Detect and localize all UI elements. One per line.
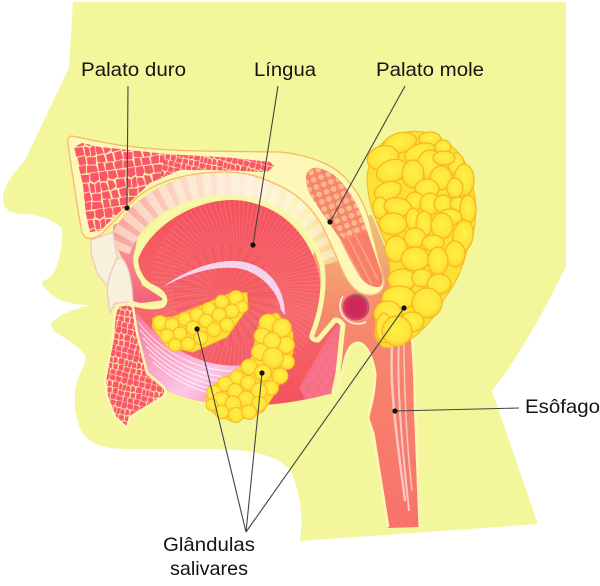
uvula	[338, 289, 374, 325]
palate cream band	[68, 136, 384, 295]
upper salivary gland	[364, 129, 476, 347]
pink gland texture	[299, 324, 340, 399]
label: palato mole: Palato mole	[376, 59, 484, 81]
lower jaw bone	[105, 304, 165, 428]
label: glândulas salivares: Glândulas	[163, 534, 255, 556]
esophagus muscle streaks	[392, 340, 412, 510]
tongue radial muscle fibres	[182, 227, 298, 343]
tongue fold	[163, 261, 285, 315]
submandibular gland	[206, 313, 294, 422]
leader line: palato mole	[327, 86, 405, 225]
sublingual gland	[152, 290, 248, 352]
label: esôfago: Esôfago	[525, 396, 600, 418]
label: glândulas salivares: salivares	[170, 558, 248, 580]
lower tongue fibres	[195, 265, 255, 325]
pink bowl	[136, 312, 240, 402]
bowl stripes	[138, 322, 234, 392]
gum and ridged arch	[113, 184, 335, 304]
soft palate muscle	[306, 168, 383, 288]
throat cream edges	[336, 335, 420, 527]
leader line: esôfago	[392, 408, 519, 414]
hard palate bone	[74, 143, 274, 232]
leader line: língua	[250, 86, 278, 248]
label: palato duro: Palato duro	[81, 59, 186, 81]
tongue cream outline	[131, 197, 343, 392]
tongue	[131, 197, 345, 408]
leader line: palato duro	[124, 86, 130, 211]
label: glândulas salivares	[163, 534, 255, 580]
teeth	[91, 232, 133, 313]
throat and esophagus	[300, 215, 420, 528]
label: língua: Língua	[254, 59, 316, 81]
leader lines: glândulas salivares	[194, 305, 407, 532]
